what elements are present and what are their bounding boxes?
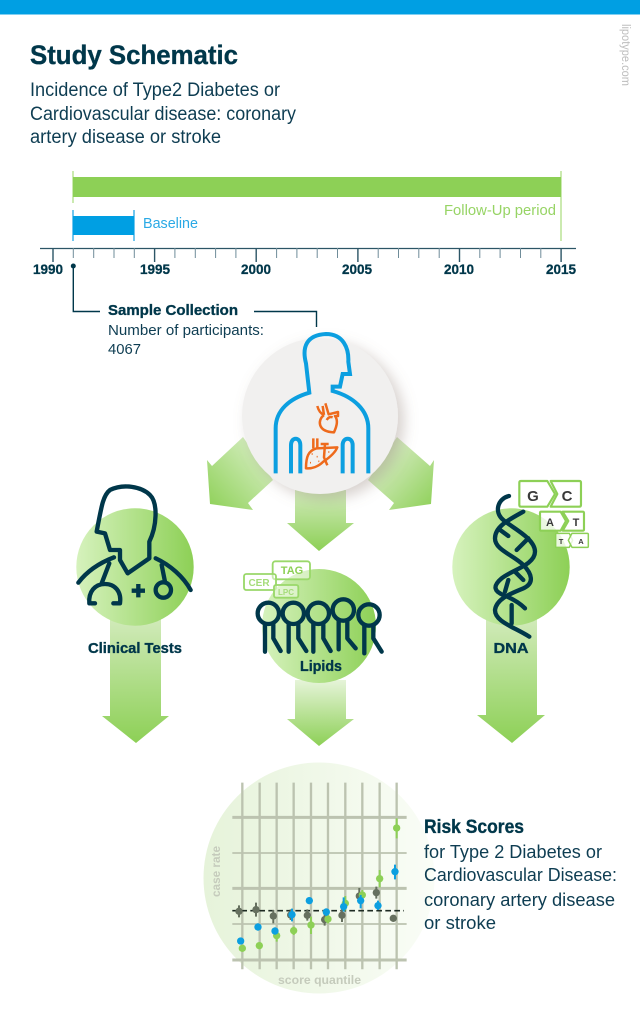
label: dna: DNA [494, 641, 529, 657]
tag labels: TAG [281, 565, 303, 577]
risk scores text: coronary artery disease [424, 889, 615, 910]
subtitle text block: Incidence of Type2 Diabetes or [30, 80, 281, 101]
top colour bar [0, 0, 640, 14]
icon: human body [276, 334, 368, 473]
sample collection text: Number of participants: [108, 323, 264, 339]
label: lipids: Lipids [300, 659, 342, 675]
base letters: T [573, 517, 580, 529]
risk scores text: Cardiovascular Disease: [424, 864, 617, 885]
arrow: dna [477, 615, 545, 743]
source credit: lipotype.com [619, 24, 631, 86]
axis label: score quantile: score quantile [278, 973, 361, 987]
icon: lipid tags [244, 561, 310, 598]
base letters: G [527, 488, 539, 505]
base letters: A [578, 537, 584, 546]
label: clinical tests: Clinical Tests [88, 641, 182, 657]
chart: score quantile plot [232, 783, 407, 969]
icon: liver [306, 438, 337, 468]
sample collection text: Sample Collection [108, 303, 238, 319]
sample collection text: 4067 [108, 342, 141, 358]
panel: clinical tests [76, 486, 194, 657]
arrow: lipids [287, 680, 354, 746]
icon: dna helix [495, 496, 535, 637]
arrow: centre down [287, 490, 354, 551]
risk scores text: Risk Scores [424, 817, 524, 838]
icon: lipid bilayer [258, 599, 382, 653]
tag labels: LPC [278, 588, 294, 597]
subtitle text block: Cardiovascular disease: coronary [30, 104, 296, 125]
year axis [33, 248, 577, 277]
subtitle text block [30, 80, 296, 148]
tag labels [248, 565, 303, 597]
base letters: T [559, 537, 564, 546]
panel: risk score chart [204, 762, 434, 994]
year axis: 2010 [444, 262, 474, 277]
panel: dna [452, 481, 588, 657]
year axis: 2000 [241, 262, 271, 277]
arrow: clinical tests [102, 615, 169, 743]
arrow: left diagonal [207, 437, 273, 510]
panel: human body circle [242, 334, 398, 494]
baseline bar [73, 210, 198, 241]
risk scores text: or stroke [424, 912, 496, 933]
baseline bar: Baseline [143, 216, 198, 232]
base letters [527, 488, 584, 546]
sample collection connector [71, 264, 316, 327]
title: Study Schematic [30, 40, 238, 70]
icon: heart [317, 403, 338, 432]
risk scores text: for Type 2 Diabetes or [424, 841, 602, 862]
subtitle text block: artery disease or stroke [30, 127, 221, 148]
follow-up period bar: Follow-Up period [444, 203, 556, 219]
axis label: case rate: case rate [211, 846, 223, 897]
arrow: right diagonal [368, 437, 434, 510]
sample collection text [108, 303, 264, 358]
panel: lipids [244, 561, 382, 683]
year axis: 1995 [140, 262, 171, 277]
follow-up period bar [73, 171, 561, 241]
year axis: 2015 [546, 262, 577, 277]
tag labels: CER [248, 578, 270, 589]
icon: base pair tags [519, 481, 588, 547]
base letters: A [546, 517, 554, 529]
year axis: 2005 [342, 262, 373, 277]
year axis: 1990 [33, 262, 63, 277]
risk scores text [424, 817, 617, 933]
icon: doctor with stethoscope [78, 486, 191, 603]
base letters: C [562, 488, 573, 505]
timeline [33, 171, 577, 277]
